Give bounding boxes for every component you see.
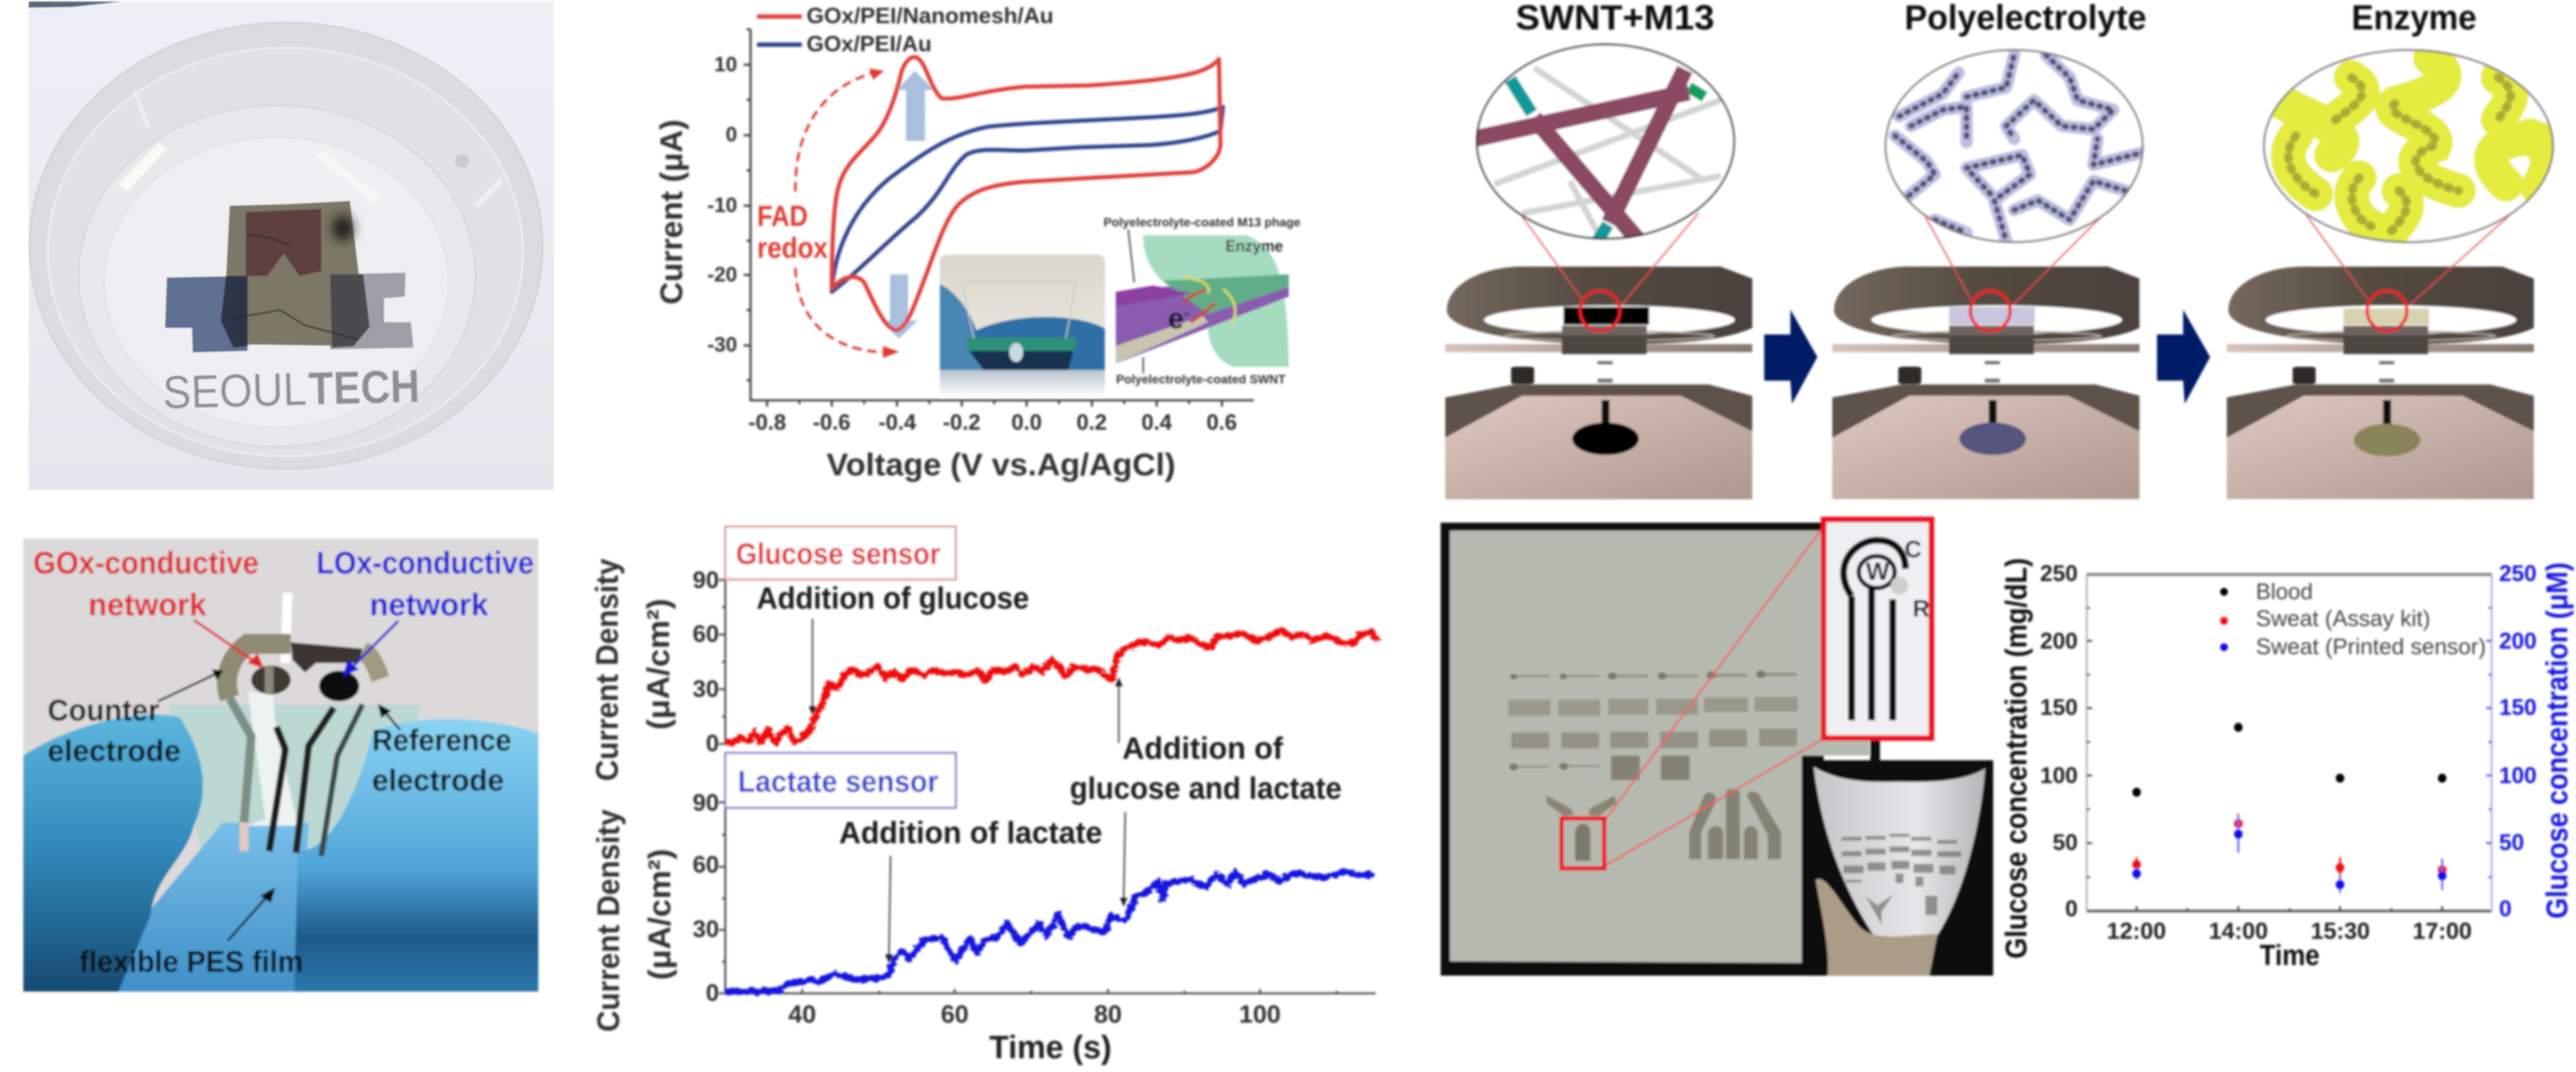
flexible sheet inset photo	[1803, 761, 1993, 976]
x axis title: Time (s)	[989, 1029, 1112, 1066]
y axis title: bottom: (μA/cm²)	[642, 849, 677, 980]
magnified view: enzyme molecules	[2264, 50, 2553, 242]
y tick labels: glucose: 0	[706, 731, 719, 757]
magnified view: SWNT and M13 network	[1471, 44, 1734, 241]
arrow: peak up	[897, 71, 934, 141]
right y tick labels: 250	[2499, 560, 2537, 586]
magnified view: polyelectrolyte coils	[1886, 50, 2145, 242]
right y tick labels: 50	[2499, 829, 2524, 855]
panel: photo of film in petri dish	[29, 2, 554, 490]
left glove	[23, 714, 203, 991]
right y tick labels: 150	[2499, 694, 2537, 720]
inset labels: e	[1168, 302, 1184, 335]
panel: printing process steps	[1445, 0, 2553, 499]
y tick labels: lactate: 60	[693, 852, 719, 878]
printer: SWNT+M13	[1445, 213, 1753, 499]
left y tick labels: 0	[2065, 896, 2078, 921]
left y axis title: Glucose concentration (mg/dL)	[2000, 558, 2033, 959]
sheet frame	[1441, 523, 1824, 976]
left y tick labels: 200	[2040, 628, 2078, 654]
y tick labels: -10	[707, 193, 737, 216]
arrow: PES film	[228, 887, 275, 941]
x tick labels: 0.0	[1012, 410, 1042, 435]
arrow: addition of glucose	[808, 619, 817, 716]
series: sweat assay kit	[2132, 814, 2447, 877]
x tick labels: 0.4	[1142, 410, 1172, 435]
left y tick labels	[2040, 560, 2078, 921]
inset labels: Polyelectrolyte-coated SWNT	[1116, 373, 1285, 387]
photo background	[29, 2, 554, 490]
y tick labels: 10	[714, 53, 737, 76]
right y tick labels: 0	[2499, 896, 2512, 921]
connector	[1870, 739, 1880, 762]
inset: beaker photo	[940, 255, 1105, 397]
inset: enzyme diagram	[1116, 230, 1289, 373]
left y tick labels: 150	[2040, 694, 2078, 720]
annotation: FAD redox: redox	[757, 231, 828, 264]
right y tick labels: 200	[2499, 628, 2537, 654]
label: Lactate sensor: Lactate sensor	[738, 766, 938, 799]
legend text: Blood	[2256, 579, 2313, 604]
sensor box: glucose	[725, 527, 956, 580]
arrow: reference electrode	[378, 704, 400, 730]
x tick labels	[2107, 918, 2472, 944]
x axis title: Voltage (V vs.Ag/AgCl)	[827, 447, 1175, 482]
legend text: Sweat (Printed sensor)	[2256, 634, 2486, 659]
selection box	[1562, 818, 1604, 869]
x tick labels: 40	[788, 1001, 816, 1028]
label: reference electrode: Reference	[372, 724, 511, 757]
x tick labels	[788, 1001, 1280, 1028]
label: counter electrode	[48, 694, 181, 768]
nanomesh film	[221, 201, 370, 348]
right y axis title: Glucose concentration (μM)	[2541, 562, 2574, 919]
photo background	[23, 539, 538, 991]
printer: Polyelectrolyte	[1833, 215, 2140, 499]
annotation: Addition of glucose and lactate	[1070, 732, 1342, 806]
curve: GOx/PEI/Nanomesh/Au	[832, 57, 1220, 330]
sensor box: lactate	[725, 753, 956, 807]
left y tick labels: 250	[2040, 560, 2078, 586]
label: LOx-conductive network	[316, 545, 534, 622]
label: GOx-conductive network: GOx-conductive	[33, 545, 259, 580]
electrode label: W: W	[1866, 558, 1889, 585]
x tick labels: 14:00	[2209, 918, 2268, 944]
centre glove	[83, 822, 309, 991]
annotation: FAD redox: FAD	[757, 200, 808, 232]
curve: GOx/PEI/Au	[832, 107, 1223, 292]
legend text: Sweat (Assay kit)	[2256, 605, 2430, 631]
right glove	[294, 719, 538, 991]
printed electrode array	[1509, 670, 1798, 861]
panel: glucose and lactate sensor responses	[590, 527, 1378, 1066]
label: GOx-conductive network	[33, 545, 259, 622]
legend: blue series: GOx/PEI/Au	[807, 32, 932, 56]
electrode label: C: C	[1904, 537, 1921, 563]
x tick labels: 12:00	[2107, 918, 2166, 944]
x tick labels: 60	[941, 1001, 969, 1028]
annotation: Addition of glucose: Addition of glucose	[757, 582, 1029, 615]
logo text: SEOULTECH: SEOUL	[162, 363, 307, 418]
curve: glucose response	[725, 630, 1378, 743]
series: blood	[2132, 723, 2447, 797]
arrow: addition of glucose and lactate (top)	[1115, 677, 1122, 743]
right y tick labels: 100	[2499, 762, 2537, 788]
series: sweat printed sensor	[2132, 816, 2447, 893]
inset labels	[1104, 216, 1301, 387]
sensor film	[169, 704, 420, 851]
axes	[719, 579, 1376, 993]
logo: gray block	[330, 273, 413, 349]
inset labels: Enzyme	[1225, 236, 1283, 255]
printer: Enzyme	[2226, 215, 2534, 499]
arrow: counter electrode	[158, 669, 223, 701]
y axis title: bottom	[591, 809, 677, 1032]
arrow: addition of glucose and lactate (bottom)	[1120, 812, 1127, 907]
arrow: GOx	[194, 620, 264, 669]
electrode enlargement box	[1824, 520, 1931, 738]
x tick labels: -0.6	[813, 410, 850, 435]
y tick labels: lactate: 30	[693, 916, 719, 943]
y axis title: top: (μA/cm²)	[641, 599, 676, 730]
legend text	[2256, 579, 2486, 659]
x tick labels: 0.6	[1207, 410, 1237, 435]
sheet	[1450, 530, 1869, 963]
x tick labels: -0.8	[748, 410, 786, 435]
y tick labels: -20	[707, 263, 737, 286]
y tick labels: -30	[707, 333, 737, 356]
y tick labels: lactate	[693, 790, 719, 1006]
right y tick labels	[2499, 560, 2537, 921]
plot frame	[2086, 574, 2492, 911]
arrow: peak down	[880, 275, 917, 339]
label: flexible PES film: flexible PES film	[79, 946, 303, 979]
white strip	[281, 593, 293, 663]
arrow: LOx	[343, 621, 398, 677]
legend lines	[757, 14, 802, 19]
label: reference electrode	[372, 724, 511, 797]
label: counter electrode: electrode	[48, 735, 181, 768]
y axis title: bottom: Current Density	[591, 809, 626, 1032]
y axis title: top: Current Density	[590, 559, 625, 781]
label: LOx-conductive network: LOx-conductive	[316, 545, 534, 580]
y tick labels: glucose: 90	[693, 567, 719, 594]
zoom lines	[1606, 529, 1822, 866]
arrow: addition of lactate	[885, 856, 893, 963]
axes	[743, 29, 1254, 407]
annotation: Addition of glucose and lactate: glucose and lactate	[1070, 772, 1342, 806]
x tick labels: 80	[1094, 1001, 1122, 1028]
label: counter electrode: Counter	[48, 694, 159, 727]
y tick labels: lactate: 90	[693, 790, 719, 816]
label: Glucose sensor: Glucose sensor	[736, 538, 940, 571]
x tick labels: 100	[1239, 1001, 1280, 1028]
petri dish	[29, 23, 543, 469]
left y tick labels: 50	[2053, 829, 2078, 855]
annotation: Addition of lactate: Addition of lactate	[839, 816, 1102, 850]
x tick labels	[748, 410, 1237, 435]
arrow: step 2 to 3	[2157, 310, 2210, 404]
left y tick labels: 100	[2040, 762, 2078, 788]
y axis title: top	[590, 559, 676, 781]
dashed redox arrows	[795, 69, 899, 358]
y tick labels: 0	[726, 123, 737, 146]
x tick labels: 0.2	[1077, 410, 1107, 435]
inset labels: -	[1184, 303, 1189, 322]
panel: printed electrode sheet photo	[1441, 520, 1993, 976]
label: reference electrode: electrode	[372, 764, 504, 797]
x tick labels: -0.2	[943, 410, 980, 435]
electrode label: R: R	[1913, 596, 1929, 622]
x tick labels: 17:00	[2413, 918, 2472, 944]
y tick labels	[707, 53, 737, 356]
y tick labels: glucose: 30	[693, 676, 719, 702]
panel: cyclic voltammetry chart	[654, 4, 1301, 482]
logo text: SEOULTECH	[162, 360, 420, 418]
annotation: Addition of glucose and lactate: Addition of	[1122, 732, 1284, 766]
inset labels: Polyelectrolyte-coated M13 phage	[1104, 216, 1301, 230]
y tick labels: lactate: 0	[706, 980, 719, 1006]
panel: glucose concentration chart	[2000, 558, 2574, 971]
y tick labels: glucose	[693, 567, 719, 757]
x axis title: Time	[2260, 939, 2320, 971]
legend: red series: GOx/PEI/Nanomesh/Au	[807, 4, 1054, 28]
x tick labels: 15:30	[2311, 918, 2370, 944]
legend markers	[2220, 588, 2228, 651]
x tick labels: -0.4	[878, 410, 917, 435]
annotation: FAD redox	[757, 200, 828, 264]
label: GOx-conductive network: network	[88, 587, 206, 622]
electrodes	[227, 642, 380, 856]
panel: flexible dual sensor photo	[23, 539, 538, 991]
y tick labels: glucose: 60	[693, 621, 719, 647]
logo text: SEOULTECH: TECH	[308, 360, 420, 415]
y axis title: Current (μA)	[654, 119, 689, 305]
arrow: step 1 to 2	[1764, 310, 1818, 404]
logo: blue block	[165, 276, 248, 353]
label: LOx-conductive network: network	[370, 587, 488, 622]
curve: lactate response	[725, 871, 1373, 992]
